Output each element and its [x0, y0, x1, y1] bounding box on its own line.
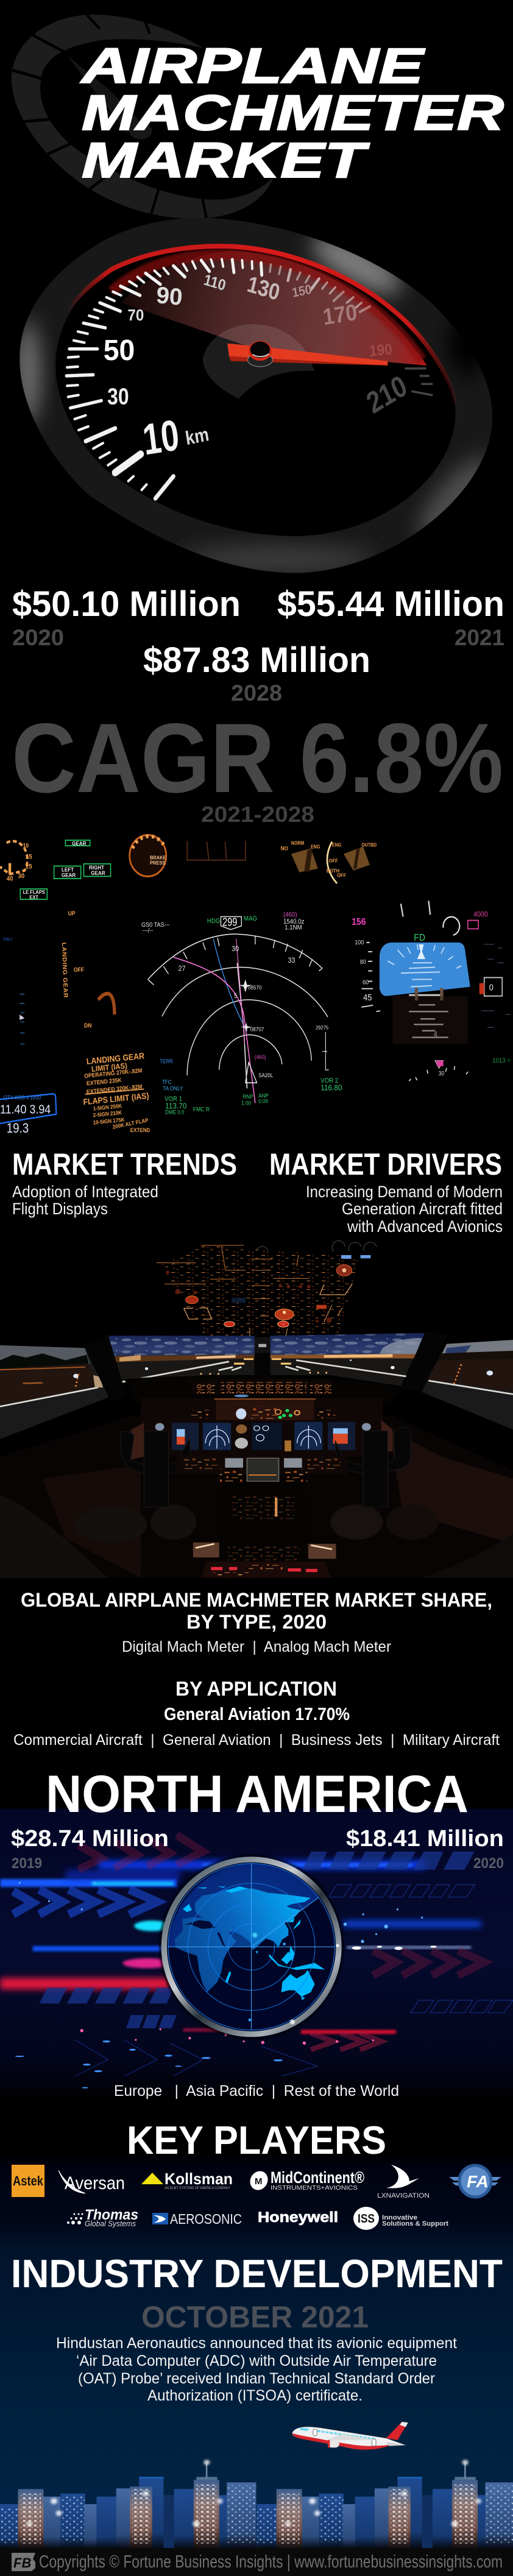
logo: Honeywell: Honeywell	[258, 2209, 338, 2226]
fuel readout	[0, 938, 56, 1136]
overhead panel	[157, 1240, 377, 1336]
market drivers	[269, 1147, 503, 1236]
top row gauges and gear lights: OFF	[337, 872, 346, 879]
logo: Kollsman	[141, 2170, 233, 2190]
gauge numbers: 190	[369, 341, 393, 360]
navigation display: 299	[222, 916, 237, 929]
primary flight display: 80	[360, 959, 366, 966]
light streaks	[0, 1861, 481, 2034]
navigation display: VOR 2	[320, 1078, 338, 1085]
top row gauges and gear lights: LEFT	[62, 866, 74, 873]
navigation display: SA20L	[258, 1072, 274, 1078]
market size 2028: 2028	[231, 681, 282, 706]
navigation display: ---/--	[143, 927, 153, 935]
gauge tick marks	[66, 259, 432, 498]
market size 2020: 2020	[12, 625, 64, 650]
market size 2020	[12, 584, 241, 650]
market share by type: BY TYPE, 2020	[186, 1611, 327, 1633]
gauge numbers: 170	[321, 299, 359, 330]
landing gear placard: OFF	[74, 966, 84, 973]
navigation display: (460)	[283, 911, 297, 919]
primary flight display	[352, 901, 511, 1081]
title: MARKET	[82, 133, 370, 188]
gauge needle	[227, 341, 387, 367]
navigation display: FMC R	[193, 1106, 210, 1113]
top row gauges and gear lights: 30	[18, 872, 25, 880]
primary flight display: 45	[363, 993, 372, 1002]
navigation display: 33	[288, 957, 295, 964]
logo: Innovative Solutions and Support: ISS	[358, 2212, 375, 2226]
navigation display: (460)	[255, 1053, 266, 1060]
landing gear placard: DN	[84, 1022, 91, 1028]
logo: MidContinent: INSTRUMENTS+AVIONICS	[271, 2185, 358, 2192]
by application: Commercial Aircraft | General Aviation | Business Jets | Military Aircraft	[13, 1732, 500, 1749]
radar section	[0, 1809, 513, 2103]
top row gauges and gear lights: 25	[26, 863, 32, 871]
top row gauges and gear lights: GEAR	[91, 870, 105, 876]
north america 2019 value: 2019	[12, 1855, 42, 1872]
red rim	[67, 246, 456, 403]
top row gauges and gear lights: BRAKE	[150, 855, 166, 861]
navigation display	[141, 911, 342, 1116]
top row gauges and gear lights: 40	[7, 876, 13, 883]
top row gauges and gear lights: ENG	[311, 844, 320, 849]
cockpit photo	[0, 1240, 513, 1578]
control yokes	[121, 1427, 411, 1507]
market drivers: with Advanced Avionics	[347, 1217, 503, 1236]
primary flight display: 4	[434, 1030, 437, 1039]
top row gauges and gear lights: GEAR	[72, 840, 87, 847]
development description: Hindustan Aeronautics announced that its avionic equipment	[56, 2335, 457, 2352]
development description: Authorization (ITSOA) certificate.	[147, 2387, 363, 2404]
primary flight display: 100	[355, 939, 364, 946]
navigation display: 113.70	[165, 1102, 186, 1111]
primary flight display: FD	[414, 933, 425, 943]
logo: MidContinent	[247, 2168, 364, 2193]
top row gauges and gear lights	[0, 835, 377, 901]
gauge numbers: 130	[245, 271, 282, 305]
north america 2019 value: $28.74 Million	[11, 1826, 169, 1852]
fuel readout: 11.40 3.94	[0, 1102, 51, 1117]
north america heading: NORTH AMERICA	[46, 1765, 469, 1824]
ghost speedometer graphic	[12, 15, 273, 220]
navigation display: ANP	[258, 1092, 269, 1099]
market size 2028: $87.83 Million	[143, 640, 370, 680]
navigation display: GS0 TAS---	[141, 921, 170, 929]
title: AIRPLANE	[80, 38, 425, 94]
navigation display: 5	[234, 993, 238, 1000]
navigation display: RNP	[242, 1094, 253, 1100]
market share by type: GLOBAL AIRPLANE MACHMETER MARKET SHARE,	[21, 1589, 492, 1611]
radar grid	[168, 1864, 334, 2030]
logo: LX Navigation: LXNAVIGATION	[377, 2192, 430, 2199]
market share by type	[21, 1589, 492, 1655]
landing gear placard: LIMIT (IAS)	[91, 1061, 127, 1074]
primary flight display: 60	[363, 979, 369, 986]
landing gear placard: EXTENDED 320K-.82M	[87, 1083, 143, 1095]
cockpit lower interior and windows	[0, 1332, 513, 1578]
fuel readout: FBLY	[3, 938, 13, 942]
top row gauges and gear lights: 10	[23, 843, 29, 849]
navigation display: 1.00	[241, 1100, 251, 1106]
chevrons	[13, 1835, 484, 2076]
top row gauges and gear lights: EXT	[29, 894, 38, 901]
fuel readout: QTY-KGS x 1000	[3, 1094, 41, 1101]
landing gear placard: LANDING GEAR	[60, 943, 68, 998]
glareshield panel	[124, 1376, 403, 1404]
by application: General Aviation 17.70%	[164, 1705, 350, 1724]
landing gear placard: LANDING GEAR	[86, 1051, 145, 1066]
development description: ‘Air Data Computer (ADC) with Outside Air Temperature	[76, 2352, 437, 2369]
footer bar	[0, 2548, 513, 2576]
by application	[13, 1677, 500, 1749]
logo: FA	[449, 2165, 501, 2197]
market size 2020: $50.10 Million	[12, 584, 241, 624]
primary flight display: 1013 =	[492, 1057, 511, 1064]
top row gauges and gear lights: PRESS	[150, 860, 166, 866]
cockpit instrument displays photo	[0, 835, 511, 1136]
logo: FA: FA	[467, 2172, 489, 2191]
logo: Astek	[12, 2165, 44, 2197]
gauge outer ring	[19, 218, 492, 573]
logo: Thomas Global Systems: Thomas	[85, 2207, 138, 2223]
logo: MidContinent: M	[255, 2176, 262, 2187]
north america 2019 value	[11, 1826, 169, 1872]
navigation display: TA ONLY	[163, 1085, 183, 1091]
logo: LX Navigation	[377, 2165, 430, 2199]
footer logo: FB	[13, 2555, 31, 2571]
logo: Astek: Astek	[13, 2173, 44, 2189]
primary flight display: 0	[489, 983, 494, 993]
city skyline	[0, 2460, 513, 2548]
gauge numbers: 10	[140, 411, 182, 464]
landing gear placard: 1-5IGN 250K	[93, 1102, 122, 1112]
top row gauges and gear lights: GEAR	[62, 872, 76, 879]
top row gauges and gear lights: BOTH	[327, 868, 339, 874]
gauge numbers: 110	[202, 271, 227, 294]
top row gauges and gear lights: 15	[26, 854, 32, 861]
airplane illustration	[292, 2422, 408, 2450]
navigation display: TERR	[160, 1058, 173, 1064]
primary flight display: 30	[439, 1070, 444, 1077]
metal bezel	[164, 1859, 339, 2034]
continents	[175, 1886, 325, 2000]
CAGR: 2021-2028	[201, 802, 314, 827]
top row gauges and gear lights: ENG	[332, 842, 341, 847]
sweep sector	[168, 1864, 319, 1947]
landing gear placard: EXTEND 235K	[87, 1077, 122, 1087]
navigation display: 116.80	[320, 1083, 342, 1092]
top row gauges and gear lights: RIGHT	[89, 864, 105, 871]
gauge numbers: 50	[104, 333, 135, 366]
top row gauges and gear lights: NORM	[291, 840, 304, 846]
navigation display: TFC	[162, 1079, 171, 1085]
navigation display: 30	[232, 945, 239, 953]
navigation display: 1540.0z	[283, 919, 304, 925]
landing gear placard: 10-5IGN 175K	[93, 1116, 126, 1126]
landing gear placard	[60, 910, 150, 1133]
market size 2021	[277, 584, 504, 650]
logo: Aversan: Aversan	[65, 2173, 125, 2193]
gauge numbers: 150	[291, 282, 313, 300]
top row gauges and gear lights: OFF	[329, 858, 338, 864]
gauge numbers: 90	[155, 281, 183, 311]
centre pedestal	[177, 1456, 347, 1560]
gauge numbers: 30	[107, 384, 129, 409]
navigation display: DME 0.0	[165, 1109, 185, 1116]
primary flight display: 4000	[473, 911, 488, 919]
landing gear placard: 200K ALT FLAP	[112, 1117, 149, 1130]
logo: Innovative Solutions and Support: Solutions & Support	[382, 2220, 448, 2227]
navigation display: 08707	[250, 1026, 264, 1032]
lit floor panels and lower panel	[193, 1543, 336, 1578]
north america 2020 value: $18.41 Million	[346, 1826, 504, 1852]
landing gear placard: OPERATING 270K-.82M	[84, 1067, 143, 1079]
title: MACHMETER	[82, 85, 504, 141]
development description	[56, 2335, 457, 2404]
navigation display: HDG	[207, 918, 220, 925]
cockpit interior	[0, 1416, 513, 1578]
footer logo	[12, 2553, 35, 2571]
market trends	[12, 1147, 237, 1218]
speedometer gauge	[19, 218, 492, 573]
other regions: Europe | Asia Pacific | Rest of the World	[114, 2082, 399, 2100]
key players heading: KEY PLAYERS	[127, 2118, 386, 2162]
north america 2020 value: 2020	[473, 1855, 504, 1872]
hub shadow	[203, 324, 315, 398]
top row gauges and gear lights: LE FLAPS	[23, 890, 45, 895]
night sky background	[0, 2102, 513, 2548]
gauge numbers: 210	[362, 369, 412, 420]
logo: Innovative Solutions and Support: Innovative	[382, 2214, 417, 2221]
landing gear placard: FLAPS LIMIT (IAS)	[83, 1091, 149, 1107]
industry development heading: INDUSTRY DEVELOPMENT	[11, 2251, 503, 2296]
by application: BY APPLICATION	[175, 1677, 337, 1700]
particles	[15, 1882, 437, 2089]
navigation display: MAG	[244, 916, 257, 922]
primary flight display: 156	[352, 917, 366, 927]
logo: Innovative Solutions and Support	[353, 2207, 448, 2230]
navigation display: 0.09	[258, 1098, 268, 1105]
gauge dial face	[55, 246, 456, 536]
windscreen windows	[0, 1333, 513, 1439]
north america 2020 value	[346, 1826, 504, 1872]
market size 2028	[143, 640, 370, 706]
gauge numbers	[104, 271, 412, 464]
navigation display: 29275	[316, 1025, 329, 1030]
market trends: MARKET TRENDS	[12, 1147, 237, 1181]
main instrument panel	[131, 1398, 392, 1460]
top row gauges and gear lights: OUTBD	[361, 842, 377, 847]
logo: Thomas Global Systems: Global Systems	[85, 2219, 136, 2228]
market trends: Adoption of Integrated	[12, 1183, 158, 1201]
top row gauges and gear lights: NO	[281, 845, 288, 852]
landing gear placard: 2-5IGN 210K	[93, 1109, 122, 1119]
slanted bars	[39, 1852, 475, 2028]
navigation display: 08570	[248, 984, 262, 991]
navigation display: 27	[179, 965, 186, 973]
logo: Aerosonic: AEROSONIC	[170, 2211, 242, 2227]
logo: Kollsman: AN ELBIT SYSTEMS OF AMERICA COMPANY	[165, 2187, 230, 2190]
logo: MidContinent: MidContinent®	[271, 2168, 364, 2187]
market trends: Flight Displays	[12, 1200, 108, 1218]
radar background and light streaks	[0, 1809, 513, 2103]
red wedge	[121, 251, 427, 366]
market size 2021: $55.44 Million	[277, 584, 504, 624]
radar globe	[159, 1854, 344, 2039]
development date: OCTOBER 2021	[141, 2300, 369, 2334]
market size 2021: 2021	[455, 625, 504, 650]
window frames	[83, 1332, 448, 1403]
development description: (OAT) Probe’ received Indian Technical Standard Order	[78, 2370, 435, 2387]
fuel readout: 19.3	[7, 1121, 29, 1136]
title	[80, 38, 504, 188]
landing gear placard: EXTEND	[130, 1127, 150, 1133]
gauge numbers: km	[184, 424, 210, 450]
logo: Thomas Global Systems	[67, 2207, 138, 2228]
navigation display: VOR 1	[165, 1095, 182, 1103]
gauge numbers: 70	[127, 307, 144, 324]
navigation display: 1.1NM	[285, 924, 302, 932]
market share by type: Digital Mach Meter | Analog Mach Meter	[122, 1638, 391, 1655]
landing gear placard: UP	[68, 910, 76, 917]
logo: Kollsman: Kollsman	[165, 2170, 233, 2188]
